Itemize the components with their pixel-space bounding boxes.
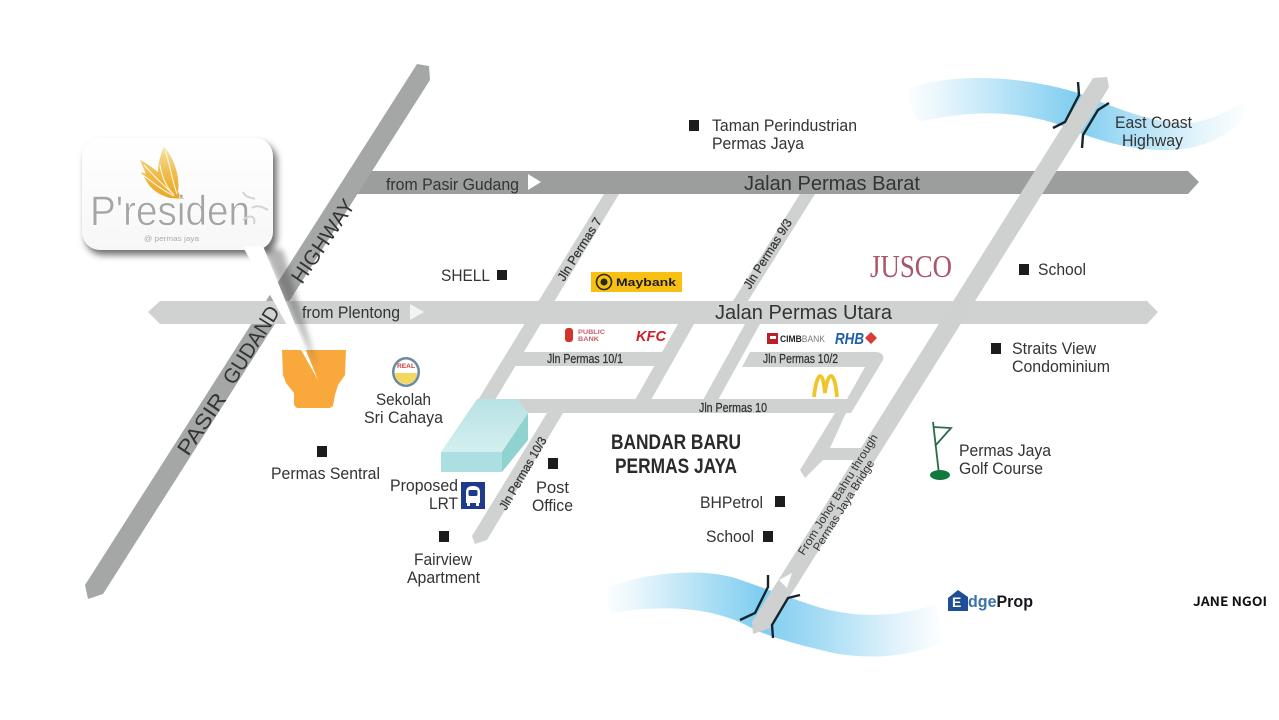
point: Proposed LRT: Proposed [390,476,458,495]
point: Fairview Apartment: Apartment [407,568,480,587]
road: Jln Permas 9/3 lower [703,324,760,400]
logo wordmark: P'residen [90,187,250,234]
logo: Public Bank [565,328,606,343]
point: BHPetrol: BHPetrol [700,493,763,512]
label: from Johor Bahru: From Johor Bahru through [796,433,881,558]
callout: P'residen logo [82,138,318,380]
logo: Maybank [591,272,682,292]
point: Shell: SHELL [441,266,490,285]
point: Straits View Condominium [991,339,1110,376]
logo: EdgeProp: dgeProp [968,593,1033,611]
logo swirl [243,192,268,224]
logo: CIMB Bank: CIMBBANK [780,334,825,344]
road: Jln Permas 7 [478,194,619,400]
logo: KFC: KFC [636,328,667,345]
icon: golf flag [930,422,951,480]
logo wings [140,147,184,199]
point: Taman Perindustrian: Permas Jaya [712,134,805,153]
point: Post Office: Office [532,496,573,515]
logo: Jusco: JUSCO [870,248,952,284]
point: Proposed LRT: LRT [429,494,458,513]
point: Taman Perindustrian: Taman Perindustrian [712,116,857,135]
icon: school crest: REAL [397,364,415,370]
point: Straits View Condominium: Condominium [1012,357,1110,376]
label: Jalan Permas Barat: Jalan Permas Barat [744,173,920,195]
label: Jln Permas 7: Jln Permas 7 [555,215,605,284]
arrow: bridge direction [779,573,792,588]
label: East Coast Highway: Highway [1122,131,1183,150]
label: Jln Permas 10: Jln Permas 10 [699,401,767,415]
label: highway name: GUDAND [219,302,285,389]
label: highway name: PASIR [173,389,231,460]
point: Sekolah Sri Cahaya [364,357,443,427]
label: Jln Permas 10/2: Jln Permas 10/2 [763,352,838,366]
point: Sekolah Sri Cahaya: Sri Cahaya [364,408,443,427]
label: Jln Permas 9/3: Jln Permas 9/3 [741,216,795,292]
point: Fairview Apartment: Fairview [414,550,473,569]
road: Jalan Permas Utara [148,301,1158,324]
road: Jln Permas 10/2, Jln Permas 10 and loop [490,352,883,478]
heading: Bandar Baru Permas Jaya: BANDAR BARU [611,431,741,454]
road: bridge highway [752,77,1109,634]
logo: Public Bank: PUBLIC [578,330,606,336]
logo: CIMB Bank [767,333,825,344]
label: Jln Permas 10/1: Jln Permas 10/1 [547,352,623,366]
heading: Bandar Baru Permas Jaya: PERMAS JAYA [615,455,737,478]
point: School east [1019,260,1086,279]
label: Jln Permas 10/3: Jln Permas 10/3 [496,434,550,512]
logo: Public Bank: BANK [578,337,600,343]
label: highway name [173,195,360,460]
point: Straits View Condominium: Straits View [1012,339,1097,358]
road: Jln Permas 10/1 [512,352,668,366]
building: proposed LRT station block [441,399,528,472]
point: School east: School [1038,260,1086,279]
point: Permas Sentral [271,446,380,483]
label: East Coast Highway: East Coast [1115,113,1192,132]
point: Permas Jaya Golf Course: Permas Jaya [959,441,1052,460]
bridge: lower railings [740,575,800,638]
heading: Bandar Baru Permas Jaya [611,431,741,478]
arrow: from Plentong: from Plentong [302,303,400,322]
marker: P'residen site [282,350,346,408]
road: Jln Permas 9/3 upper [733,194,815,301]
logo: EdgeProp: E [952,594,961,610]
point: School south: School [706,527,754,546]
point: Post Office: Post [536,478,569,497]
road: Jalan Permas Barat [356,171,1199,195]
point: Permas Jaya Golf Course [930,422,1052,480]
label: Jalan Permas Utara: Jalan Permas Utara [715,302,893,324]
point: Proposed LRT [390,476,485,513]
bridge: upper railings [1053,82,1109,148]
point: Sekolah Sri Cahaya: Sekolah [376,390,431,409]
point: Permas Sentral: Permas Sentral [271,464,380,483]
point: Taman Perindustrian [689,116,857,153]
river: upper strait [909,78,1248,150]
logo: EdgeProp [948,590,1033,611]
agent name: JANE NGOI [1193,591,1267,610]
point: Fairview Apartment [407,531,480,587]
road: Pasir Gudang Highway [85,64,430,599]
arrow: from Pasir Gudang: from Pasir Gudang [386,175,519,194]
road: Jln Permas 10/3 [472,413,563,544]
label: from Johor Bahru: Permas Jaya Bridge [811,458,877,554]
logo: McDonald's [814,376,837,397]
label: East Coast Highway [1115,113,1192,150]
road: connector lower middle [635,324,694,400]
point: Post Office [532,458,573,515]
label: highway name: HIGHWAY [287,195,360,288]
river: lower strait [607,573,945,656]
icon: train [461,482,485,509]
logo tagline: @ permas jaya [144,234,200,243]
point: Permas Jaya Golf Course: Golf Course [959,459,1043,478]
logo: RHB: RHB [835,331,864,348]
logo: Maybank: Maybank [616,277,677,289]
